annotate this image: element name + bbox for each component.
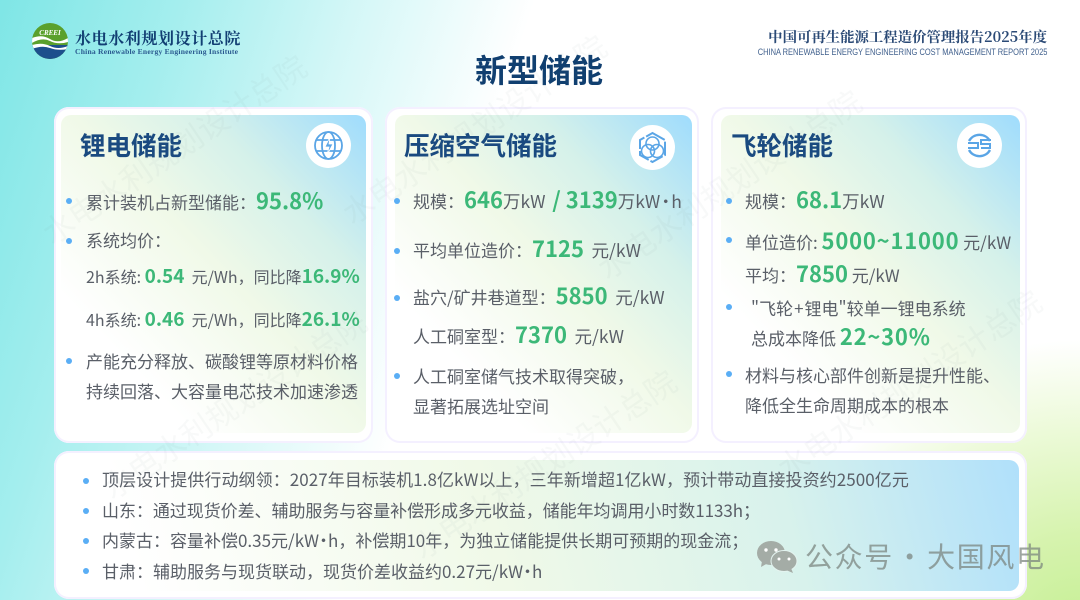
text: 4h system: 4h系统: 0.46 元/Wh，同比降26.1% <box>86 305 360 332</box>
icon: hexagon <box>630 125 675 170</box>
text: shandong: 山东：通过现货价差、辅助服务与容量补偿形成多元收益，储能年均调用小时数1133h； <box>102 497 760 522</box>
heading: flywheel: 飞轮储能 <box>731 126 833 163</box>
text: air note: 显著拓展选址空间 <box>413 393 549 418</box>
report title chinese: 中国可再生能源工程造价管理报告2025年度 <box>768 26 1047 47</box>
text: scale: 规模：646万kW / 3139万kW·h <box>413 183 682 215</box>
text: system price: 系统均价： <box>86 227 171 252</box>
text: lithium note: 产能充分释放、碳酸锂等原材料价格 <box>86 348 358 373</box>
watermark: 水电水利规划设计总院 <box>767 278 1049 488</box>
report title english: CHINA RENEWABLE ENERGY ENGINEERING COST MANAGEMENT REPORT 2025 <box>757 47 1047 58</box>
title: 新型储能 <box>475 46 603 92</box>
watermark: 水电水利规划设计总院 <box>402 358 684 568</box>
report title <box>757 26 1048 58</box>
text: flywheel note: 材料与核心部件创新是提升性能、 <box>745 362 1000 387</box>
logo chinese name: 水电水利规划设计总院 <box>75 26 241 49</box>
text: inner mongolia: 内蒙古：容量补偿0.35元/kW·h，补偿期10年，为独立储能提供长期可预期的现金流； <box>102 527 748 552</box>
heading: lithium: 锂电储能 <box>80 126 182 163</box>
text: lithium note <box>86 348 358 403</box>
text: average: 平均：7850 元/kW <box>745 257 900 289</box>
text: air note <box>413 363 634 418</box>
heading: compressed air: 压缩空气储能 <box>404 126 557 163</box>
text: flywheel note: 降低全生命周期成本的根本 <box>745 392 949 417</box>
icon: logo emblem: CREEI <box>39 29 61 37</box>
wechat source mark <box>757 536 1046 576</box>
icon: logo emblem <box>32 23 68 59</box>
text: scale: 规模：68.1万kW <box>745 183 885 215</box>
text: unit cost: 单位造价: 5000~11000 元/kW <box>745 224 1011 256</box>
icon: flywheel <box>957 123 1002 168</box>
icon: globe bolt <box>306 123 351 168</box>
watermark: 水电水利规划设计总院 <box>92 298 374 508</box>
text: hybrid note: "飞轮+锂电"较单一锂电系统 <box>751 295 966 320</box>
text: lithium note: 持续回落、大容量电芯技术加速渗透 <box>86 378 358 403</box>
text: artificial chamber: 人工硐室型：7370 元/kW <box>413 318 624 350</box>
watermark: 水电水利规划设计总院 <box>587 78 869 288</box>
text: 2h system: 2h系统: 0.54 元/Wh，同比降16.9% <box>86 262 360 289</box>
panel: policy <box>54 451 1027 599</box>
text: average cost: 平均单位造价：7125 元/kW <box>413 232 641 264</box>
icon: wechat <box>757 541 798 573</box>
panel: flywheel <box>711 107 1027 443</box>
panel: lithium storage <box>54 107 373 443</box>
watermark: 水电水利规划设计总院 <box>332 23 614 233</box>
text: top-level design: 顶层设计提供行动纲领：2027年目标装机1.8亿kW以上，三年新增超1亿kW，预计带动直接投资约2500亿元 <box>102 466 909 491</box>
watermark: 水电水利规划设计总院 <box>32 43 314 253</box>
panel: compressed air <box>385 107 699 443</box>
text: air note: 人工硐室储气技术取得突破， <box>413 363 634 388</box>
text: account name: 公众号 · 大国风电 <box>805 536 1046 576</box>
logo english name: China Renewable Energy Engineering Institute <box>75 47 238 56</box>
text: cost reduction: 总成本降低 22~30% <box>751 320 931 352</box>
text: salt cavern: 盐穴/矿井巷道型：5850 元/kW <box>413 279 665 311</box>
text: share: 累计装机占新型储能：95.8% <box>86 184 323 216</box>
logo <box>32 23 241 59</box>
text: gansu: 甘肃：辅助服务与现货联动，现货价差收益约0.27元/kW·h <box>102 558 542 583</box>
text: flywheel note <box>745 362 1000 417</box>
